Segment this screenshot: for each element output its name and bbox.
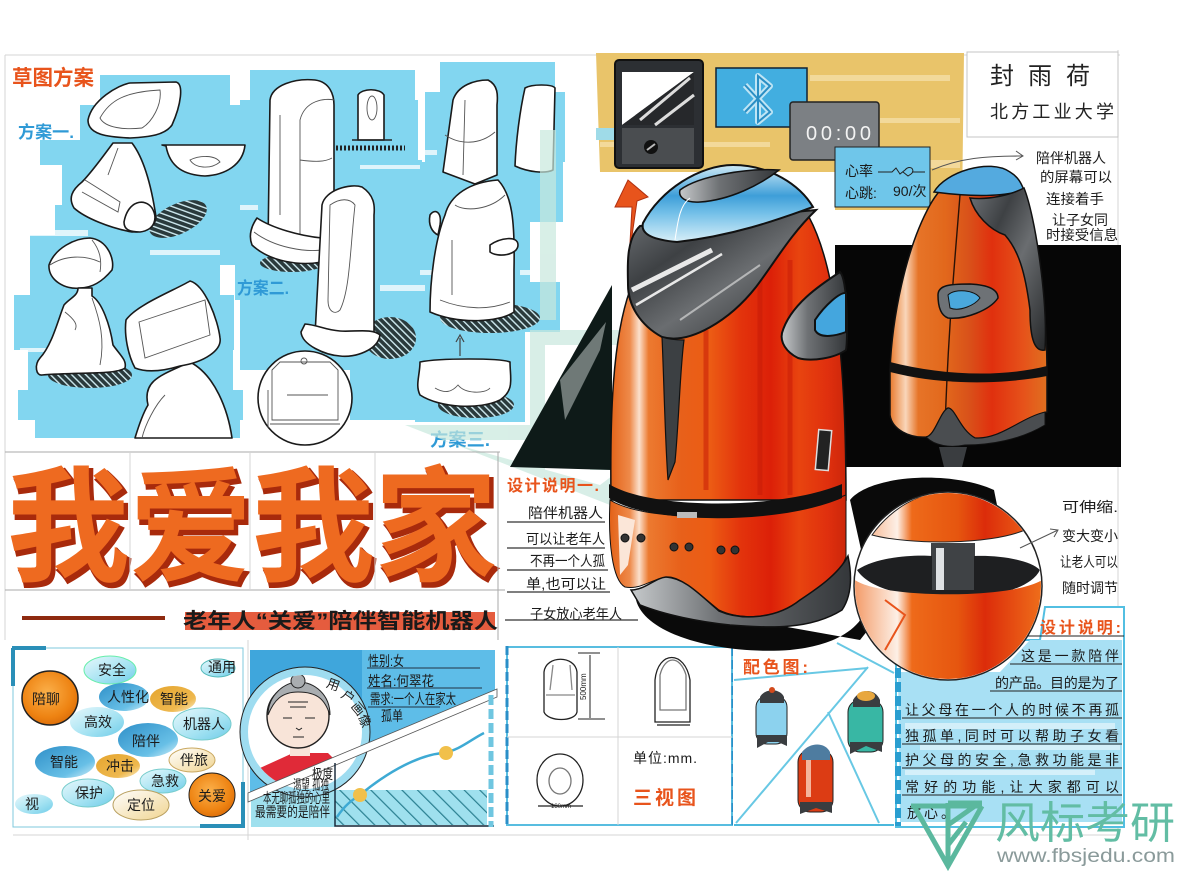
subtitle: 老年人“关爱”陪伴智能机器人 xyxy=(183,610,498,633)
persona facts: 性别:女 xyxy=(368,653,404,669)
orange lower bowl xyxy=(855,580,1041,679)
design notes two body: 常好的功能,让大家都可以 xyxy=(905,779,1119,795)
annotation: companion robot screen: 陪伴机器人 xyxy=(1036,150,1106,166)
title: 我爱我家 xyxy=(10,430,500,611)
belt band xyxy=(609,484,842,518)
robot body xyxy=(611,217,846,500)
persona ring label: 户 xyxy=(338,687,358,707)
gray post xyxy=(931,543,975,593)
sketch: scheme three robot xyxy=(429,80,540,333)
persona facts xyxy=(367,653,482,724)
heading: design notes one: 设计说明一. xyxy=(507,477,599,495)
bubble: locate xyxy=(113,790,169,820)
heading: design notes two: 设计说明: xyxy=(1040,619,1121,637)
annotation: extendable: 可伸缩. xyxy=(1062,499,1118,515)
annotation: companion robot screen: 的屏幕可以 xyxy=(1040,169,1112,185)
bubble: safety xyxy=(84,656,136,684)
emotion curve chart xyxy=(335,733,494,826)
sketch: scheme one tablet robot xyxy=(125,281,232,438)
bubble: protect xyxy=(62,779,114,807)
persona need text: 本无聊孤独的心里 xyxy=(263,790,330,806)
persona facts: 姓名:何翠花 xyxy=(368,673,434,689)
blue cap xyxy=(643,165,813,242)
arrow: up to robot xyxy=(456,335,464,356)
bubble: protect: 保护 xyxy=(75,785,103,801)
top view xyxy=(537,754,583,810)
panel: design notes two xyxy=(896,607,1124,827)
top view: 130mm xyxy=(551,804,571,810)
design notes two body: 独孤单,同时可以帮助子女看 xyxy=(905,728,1119,744)
bubble: monitor: 视 xyxy=(25,796,39,812)
black backdrop panel xyxy=(835,245,1121,467)
bubble: impact xyxy=(96,754,140,778)
front view xyxy=(544,659,577,720)
bubble: care: 关爱 xyxy=(198,788,226,804)
persona facts: 孤单 xyxy=(381,708,403,724)
icon: tablet device xyxy=(615,60,703,168)
icon: heart rate card: 心率 xyxy=(845,163,873,179)
side view robot xyxy=(890,166,1047,467)
collar xyxy=(628,210,816,339)
annotation: companion robot screen xyxy=(932,150,1118,243)
bubble: safety: 安全 xyxy=(98,662,126,678)
bubble: humanized: 人性化 xyxy=(107,689,149,705)
side view button xyxy=(938,284,998,318)
design notes two body: 护父母的安全,急救功能是非 xyxy=(905,752,1119,768)
bubble: smart gold: 智能 xyxy=(160,691,188,707)
persona ring label: 用 xyxy=(325,675,342,694)
heading: sketch schemes: 草图方案 xyxy=(12,66,94,90)
design notes two body xyxy=(905,648,1119,821)
label: scheme three: 方案三. xyxy=(430,429,490,450)
bubble: monitor xyxy=(15,794,53,814)
annotation: extendable: 让老人可以 xyxy=(1060,554,1118,570)
side handle xyxy=(782,272,847,360)
bubble: smart gold xyxy=(150,686,196,712)
lower body xyxy=(610,495,846,617)
panel: sketch schemes xyxy=(12,62,565,450)
icon: digital clock card xyxy=(790,102,879,160)
watermark: center logo xyxy=(405,130,700,505)
bubble: universal: 通用 xyxy=(208,659,236,675)
title: 我爱我家 xyxy=(7,426,497,607)
height dimension: 500mm xyxy=(579,673,588,700)
sketch: scheme three side view xyxy=(515,85,555,172)
side view xyxy=(655,658,690,725)
design notes two body: 这是一款陪伴 xyxy=(1021,648,1119,664)
annotation: extendable: 随时调节 xyxy=(1062,580,1118,596)
bubble: companion: 陪伴 xyxy=(132,733,160,749)
swatch: blue robot xyxy=(756,687,787,748)
bubble: smart blue: 智能 xyxy=(50,754,78,770)
bubble: rescue xyxy=(140,769,186,793)
watermark: brand name: 风标考研 xyxy=(995,799,1175,848)
persona ring label: 画 xyxy=(348,699,368,719)
persona facts: 需求:一个人在家太 xyxy=(370,691,456,707)
design notes one: 可以让老年人 xyxy=(526,531,605,547)
persona need text: 渴望 孤独 xyxy=(293,777,329,793)
sketch: small tower detail xyxy=(336,90,405,148)
yellow marker panel xyxy=(596,53,964,210)
persona need text xyxy=(255,766,333,820)
bubble: humanized xyxy=(99,683,149,711)
annotation: companion robot screen: 连接着手 xyxy=(1046,191,1104,207)
bubble: efficient xyxy=(70,707,124,737)
design notes two body: 放心。 xyxy=(907,805,955,821)
side view seam xyxy=(945,195,960,430)
icon: heart rate card: 心跳: xyxy=(845,185,877,201)
persona ring label: 像 xyxy=(355,712,374,730)
side view blue cap xyxy=(934,166,1024,196)
diagonal white band xyxy=(248,689,497,802)
annotation: companion robot screen: 让子女同 xyxy=(1052,212,1108,228)
icon: digital clock card: 00:00 xyxy=(806,123,871,145)
persona portrait ring xyxy=(240,667,370,797)
gray foot xyxy=(631,556,850,627)
design notes one: 单,也可以让 xyxy=(526,576,606,592)
panel: colour scheme xyxy=(733,643,894,825)
black base shadow xyxy=(636,478,1000,651)
side view foot xyxy=(926,408,1045,446)
panel: keyword bubbles xyxy=(12,648,243,827)
subtitle divider line xyxy=(22,616,165,620)
annotation: companion robot screen: 时接受信息 xyxy=(1046,227,1118,243)
height dimension xyxy=(578,653,605,719)
unit label: 单位:mm. xyxy=(633,750,697,766)
design notes one: 陪伴机器人 xyxy=(528,505,603,521)
annotation: extendable xyxy=(1020,499,1118,596)
blue marker background xyxy=(14,62,565,438)
design notes one xyxy=(505,477,638,622)
label: scheme one: 方案一. xyxy=(18,122,74,142)
author info box xyxy=(967,52,1118,137)
watermark: brand logo icon xyxy=(911,803,982,866)
side slot xyxy=(815,430,832,471)
bubble: partner: 伴旅 xyxy=(180,752,208,768)
design notes two body: 的产品。目的是为了 xyxy=(995,675,1119,691)
bubble: care xyxy=(189,773,235,817)
panel: user persona xyxy=(240,650,497,827)
sketch: scheme one screen robot xyxy=(71,82,245,246)
side view dark collar xyxy=(970,188,1045,350)
school name: 北方工业大学 xyxy=(990,102,1114,122)
panel: three views xyxy=(507,646,733,826)
persona need text: 极度 xyxy=(312,766,333,782)
bubble: locate: 定位 xyxy=(127,797,155,813)
bubble: rescue: 急救 xyxy=(151,773,179,789)
bubble: impact: 冲击 xyxy=(106,758,134,774)
detail circle: telescoping top xyxy=(854,492,1042,690)
black backdrop left triangle xyxy=(510,285,612,470)
sketch: scheme three base xyxy=(418,359,514,418)
view heading: 三视图 xyxy=(633,787,696,809)
sketch: tower robot back xyxy=(250,80,334,272)
icon: bluetooth card xyxy=(716,68,807,127)
bubble: smart blue xyxy=(35,746,95,778)
design notes two rules xyxy=(902,636,1124,795)
bubble: efficient: 高效 xyxy=(84,714,112,730)
design notes one: 子女放心老年人 xyxy=(530,606,622,622)
label: scheme two: 方案二. xyxy=(237,278,289,298)
center drip strip xyxy=(662,337,684,480)
orange dome piece xyxy=(872,492,1025,542)
author name: 封雨荷 xyxy=(990,63,1090,90)
sketch: tower robot front xyxy=(301,186,416,359)
swatch: teal robot xyxy=(848,691,883,754)
bubble: robot xyxy=(173,708,231,740)
icon: heart rate card xyxy=(835,147,930,207)
bubble: companion xyxy=(118,723,178,757)
persona need text: 最需要的是陪伴 xyxy=(255,804,330,820)
heading: colour scheme: 配色图: xyxy=(743,657,808,677)
sketch: round top view xyxy=(258,351,352,445)
bubble: chat: 陪聊 xyxy=(32,691,60,707)
sketch: scheme one round-head robot xyxy=(36,238,132,388)
main robot xyxy=(609,165,1000,651)
swatch: red robot xyxy=(798,744,833,814)
watermark: url: www.fbsjedu.com xyxy=(996,846,1175,867)
side view belt xyxy=(890,362,1047,382)
persona ring label xyxy=(325,675,374,730)
bubble: chat xyxy=(22,671,78,725)
bubble: robot: 机器人 xyxy=(183,716,225,732)
design notes one: 不再一个人孤 xyxy=(530,553,605,569)
design notes two body: 让父母在一个人的时候不再孤 xyxy=(905,702,1119,718)
icon: heart rate card: 90/次 xyxy=(893,183,926,199)
bubble: partner xyxy=(169,748,215,772)
dark lid xyxy=(857,556,1040,598)
button dots xyxy=(621,534,739,554)
annotation: extendable: 变大变小 xyxy=(1062,528,1118,544)
arrow: orange up arrow xyxy=(615,180,648,243)
portrait xyxy=(248,675,362,789)
